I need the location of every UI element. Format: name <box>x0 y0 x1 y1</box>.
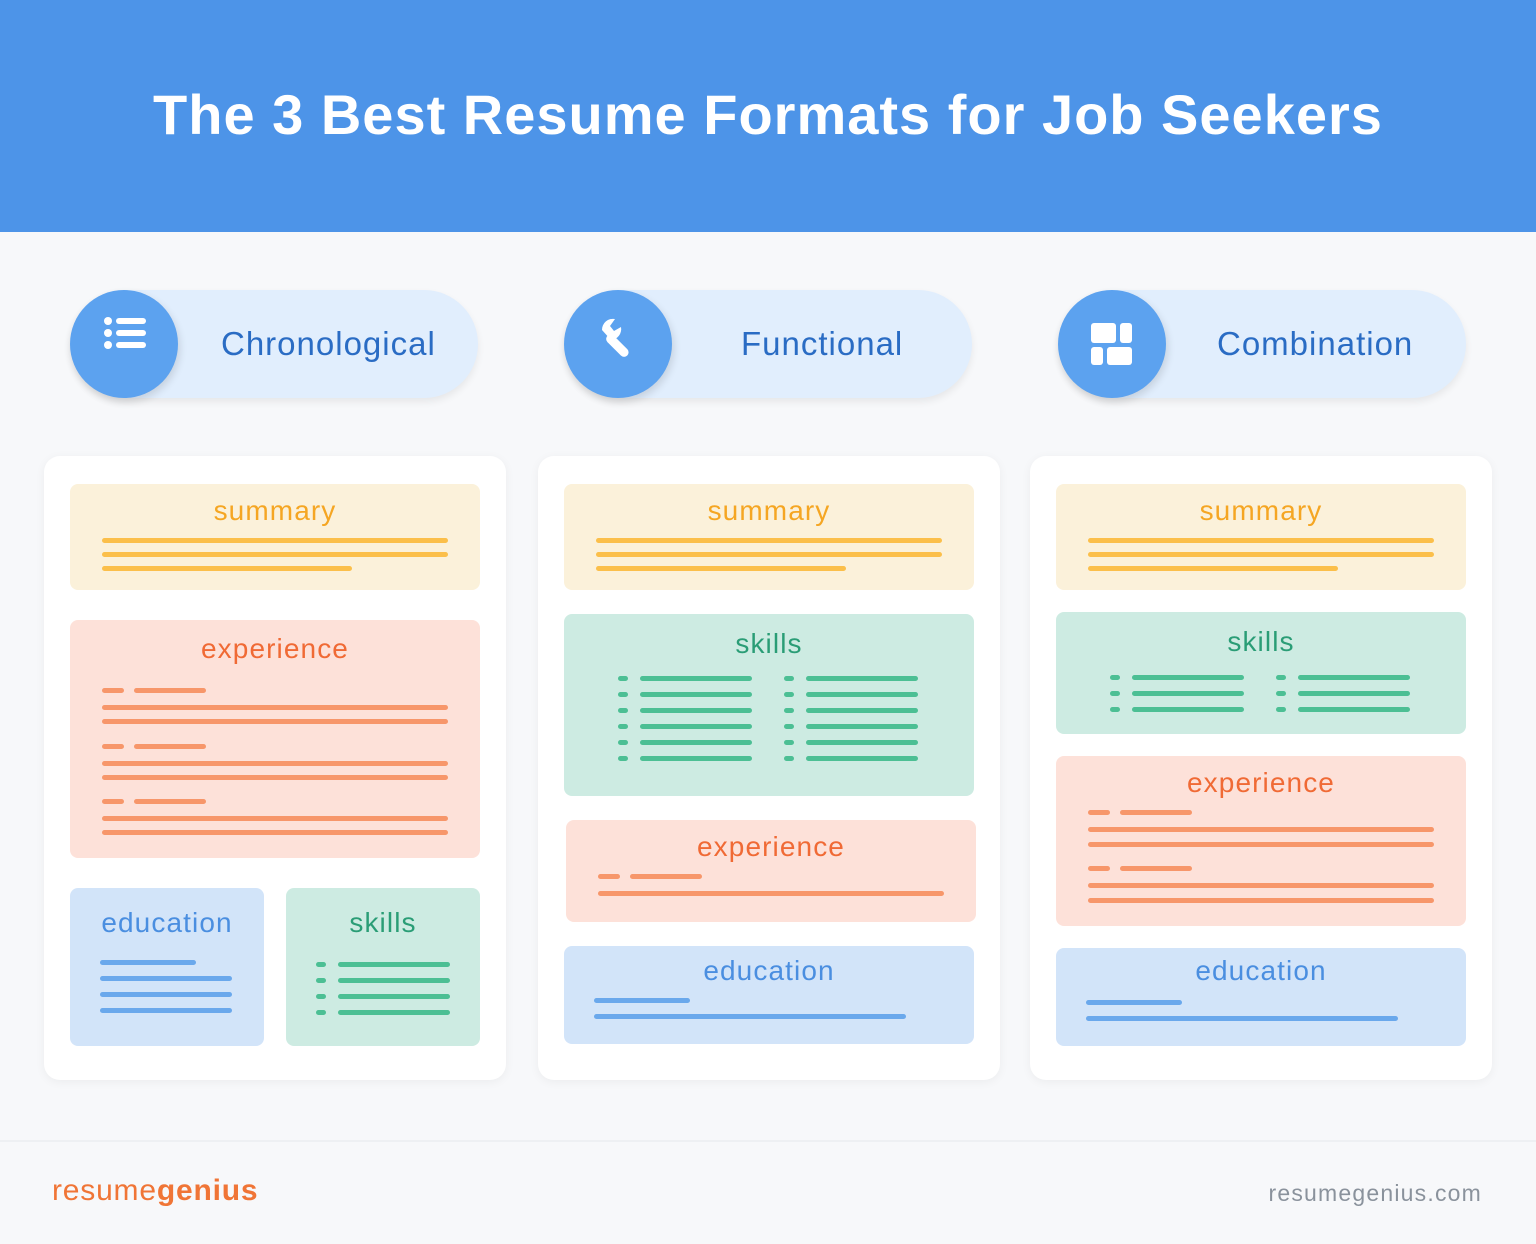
title: The 3 Best Resume Formats for Job Seekers <box>153 83 1383 146</box>
summary section <box>1056 484 1466 590</box>
summary section <box>70 484 480 590</box>
summary section <box>564 484 974 590</box>
panel: chronological card <box>44 456 506 1080</box>
experience section: experience <box>1187 767 1335 798</box>
skills section <box>1056 612 1466 734</box>
summary section: summary <box>1200 495 1322 526</box>
skills section <box>286 888 480 1046</box>
summary section: summary <box>214 495 336 526</box>
skills section: skills <box>1227 626 1295 657</box>
experience section <box>70 620 480 858</box>
summary section: summary <box>708 495 830 526</box>
education section: education <box>703 955 835 986</box>
icon: list <box>70 290 178 398</box>
education section: education <box>101 907 233 938</box>
skills section <box>564 614 974 796</box>
education section: education <box>1195 955 1327 986</box>
experience section: experience <box>697 831 845 862</box>
label: Combination <box>1217 325 1413 362</box>
footer <box>0 1140 1536 1244</box>
logo: resumegenius <box>52 1174 258 1207</box>
education section <box>564 946 974 1044</box>
skills section: skills <box>349 907 417 938</box>
panel: functional card <box>538 456 1000 1080</box>
label: Chronological <box>221 325 436 362</box>
label: Functional <box>741 325 903 362</box>
skills section: skills <box>735 628 803 659</box>
experience section <box>1056 756 1466 926</box>
icon: wrench <box>564 290 672 398</box>
pill: combination <box>1058 290 1466 398</box>
url: resumegenius.com <box>1268 1180 1482 1206</box>
experience section: experience <box>201 633 349 664</box>
pill: functional <box>564 290 972 398</box>
header banner <box>0 0 1536 232</box>
education section <box>70 888 264 1046</box>
panel: combination card <box>1030 456 1492 1080</box>
education section <box>1056 948 1466 1046</box>
icon: grid <box>1058 290 1166 398</box>
pill: chronological <box>70 290 478 398</box>
experience section <box>566 820 976 922</box>
